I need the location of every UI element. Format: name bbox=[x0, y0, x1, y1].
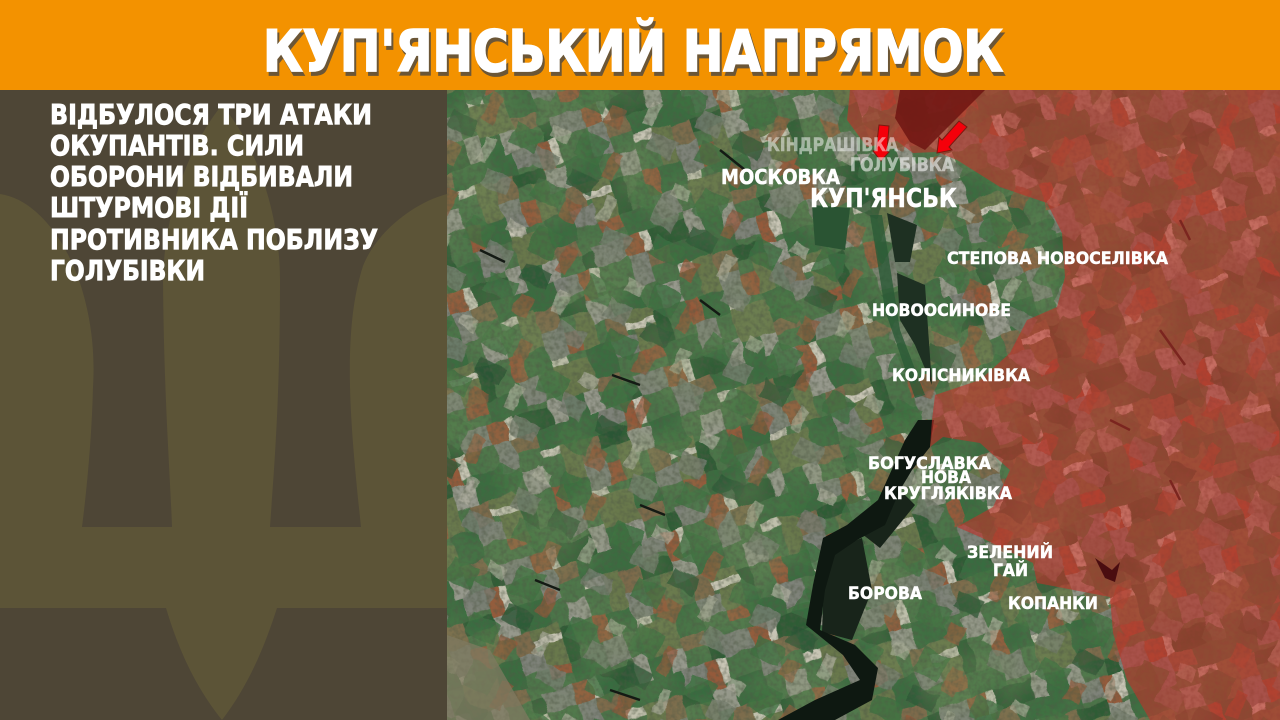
panel: left text panel bbox=[0, 90, 447, 720]
label: Borova: БОРОВА bbox=[848, 584, 923, 604]
river: Oskil bbox=[778, 420, 934, 720]
dark reservoir bbox=[1095, 558, 1120, 582]
label: Nova: НОВА bbox=[921, 468, 972, 488]
arrow: northern attack on Holubivka bbox=[873, 125, 889, 161]
occupied zone overlay bbox=[847, 90, 1280, 720]
text block: summary: ВІДБУЛОСЯ ТРИ АТАКИ bbox=[50, 98, 372, 131]
label: Holubivka: ГОЛУБІВКА bbox=[850, 154, 954, 176]
text block: summary bbox=[50, 98, 378, 287]
label: Stepova Novoselivka: СТЕПОВА НОВОСЕЛІВКА bbox=[947, 249, 1169, 269]
label: Kopanky: КОПАНКИ bbox=[1008, 594, 1098, 614]
label: Zelenyi: ЗЕЛЕНИЙ bbox=[967, 541, 1053, 563]
text block: summary: ГОЛУБІВКИ bbox=[50, 254, 205, 287]
label: Moskovka: МОСКОВКА bbox=[721, 165, 840, 189]
text block: summary: ШТУРМОВІ ДІЇ bbox=[50, 190, 248, 224]
text block: summary: ПРОТИВНИКА ПОБЛИЗУ bbox=[50, 223, 378, 256]
ravines bbox=[480, 150, 1190, 700]
map: satellite view with occupied zone bbox=[430, 70, 1280, 720]
icon: trident emblem watermark bbox=[0, 105, 447, 720]
town and forest areas bbox=[447, 205, 932, 720]
label: Hai: ГАЙ bbox=[993, 559, 1028, 581]
title: КУП'ЯНСЬКИЙ НАПРЯМОК bbox=[263, 17, 1003, 85]
label: Bohuslavka: БОГУСЛАВКА bbox=[868, 454, 992, 474]
dark red forest bbox=[895, 90, 985, 150]
text block: summary: ОБОРОНИ ВІДБИВАЛИ bbox=[50, 160, 353, 193]
label: Kolisnykivka: КОЛІСНИКІВКА bbox=[892, 366, 1031, 386]
header band bbox=[0, 0, 1280, 90]
text block: summary: ОКУПАНТІВ. СИЛИ bbox=[50, 129, 304, 162]
label: Kindrashivka: КІНДРАШІВКА bbox=[767, 134, 898, 156]
label: Kruhliakivka: КРУГЛЯКІВКА bbox=[884, 484, 1013, 504]
map labels bbox=[721, 134, 1169, 614]
label: Kupiansk: КУП'ЯНСЬК bbox=[810, 184, 957, 214]
label: Novoosynove: НОВООСИНОВЕ bbox=[872, 301, 1011, 321]
arrow: north-eastern attack on Holubivka bbox=[937, 121, 967, 153]
